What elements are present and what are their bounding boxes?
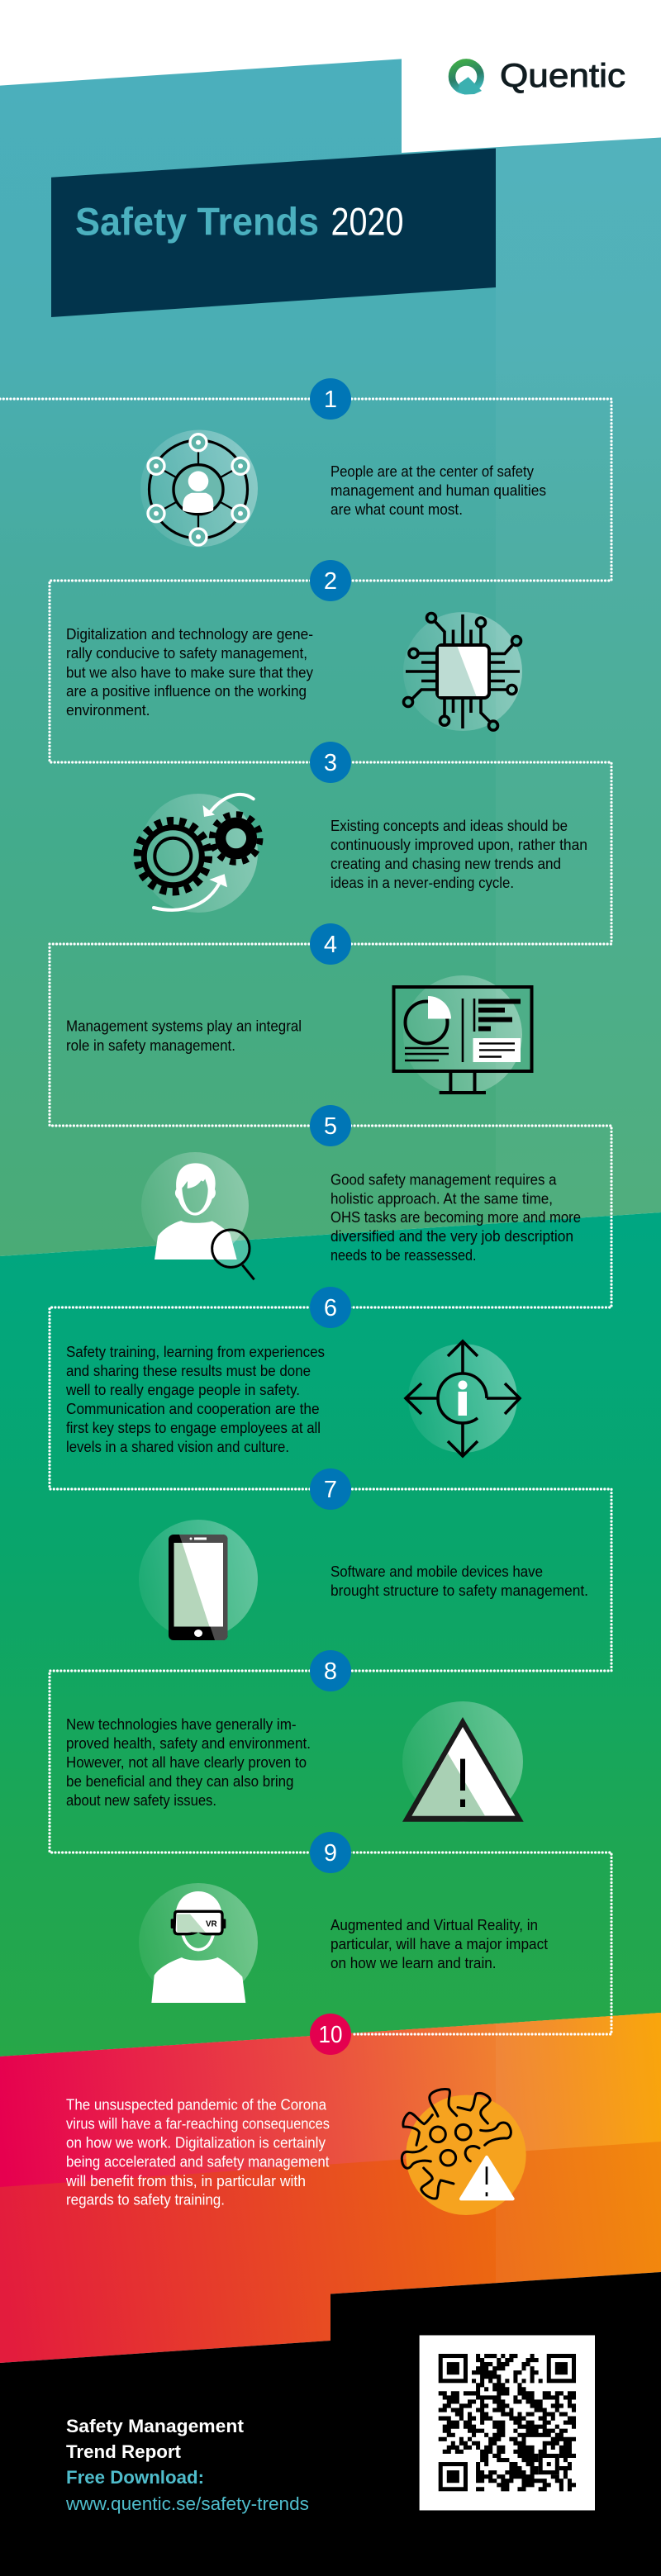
- badge 6: [310, 1287, 351, 1328]
- text 10: virus will have a far-reaching consequences: [66, 2116, 330, 2132]
- icon: virus with warning: [402, 2090, 526, 2215]
- panel: trend 10: [65, 2014, 526, 2215]
- text 4: [66, 1018, 302, 1054]
- icon: microchip: [403, 612, 522, 731]
- panel: trend 7: [139, 1468, 588, 1640]
- badge 2: 2: [324, 568, 337, 595]
- text 5: [330, 1172, 581, 1264]
- title banner: Safety Trends: [75, 199, 319, 243]
- dotted connector path: [0, 399, 611, 2034]
- text 8: proved health, safety and environment.: [66, 1735, 311, 1752]
- badge 8: 8: [324, 1658, 337, 1685]
- text 7: [330, 1563, 588, 1599]
- text 8: about new safety issues.: [66, 1792, 216, 1809]
- badge 7: 7: [324, 1477, 337, 1503]
- icon: people network: [140, 429, 258, 547]
- badge 8: [310, 1650, 351, 1691]
- icon: info with four arrows: [405, 1341, 521, 1456]
- icon: person with VR headset: VR: [206, 1919, 217, 1928]
- badge 4: [310, 923, 351, 965]
- text 4: Management systems play an integral: [66, 1018, 302, 1035]
- text 7: brought structure to safety management.: [330, 1582, 588, 1599]
- text 1: are what count most.: [330, 501, 463, 518]
- background: lighter right column upper: [496, 137, 661, 1223]
- badge 10: 10: [319, 2022, 342, 2048]
- text 9: Augmented and Virtual Reality, in: [330, 1917, 538, 1933]
- text 2: environment.: [66, 702, 150, 719]
- title banner: 2020: [330, 199, 403, 243]
- text 9: [330, 1917, 548, 1971]
- badge 6: 6: [324, 1295, 337, 1321]
- footer: black field: [0, 2272, 661, 2576]
- panel: trend 5: [141, 1105, 581, 1279]
- badge 4: 4: [324, 932, 337, 958]
- text 8: New technologies have generally im-: [66, 1716, 297, 1733]
- background: lighter right column lower: [496, 2013, 661, 2283]
- text 6: Safety training, learning from experiences: [66, 1344, 325, 1360]
- badge 3: [310, 742, 351, 783]
- QR code: [420, 2336, 595, 2511]
- icon: smartphone: [139, 1520, 258, 1640]
- text 6: [65, 1344, 325, 1455]
- background: red-orange light band: [0, 2013, 661, 2187]
- background: teal upper field: [0, 59, 661, 1256]
- text 2: rally conducive to safety management,: [66, 645, 307, 662]
- text 9: particular, will have a major impact: [330, 1936, 548, 1952]
- badge 7: [310, 1468, 351, 1510]
- text 6: and sharing these results must be done: [66, 1363, 311, 1379]
- text 6: well to really engage people in safety.: [65, 1382, 300, 1398]
- badge 9: [310, 1832, 351, 1873]
- icon: dashboard monitor: [393, 975, 532, 1094]
- text 2: but we also have to make sure that they: [66, 664, 313, 681]
- text 8: [66, 1716, 311, 1809]
- text 10: [65, 2097, 330, 2208]
- logo: Quentic: [452, 58, 625, 94]
- text 3: [330, 818, 587, 891]
- text 3: Existing concepts and ideas should be: [330, 818, 568, 834]
- badge 1: 1: [324, 387, 337, 413]
- panel: trend 2: [66, 560, 522, 731]
- icon: person with VR headset: [139, 1883, 258, 2003]
- text 5: needs to be reassessed.: [330, 1247, 476, 1264]
- panel: trend 3: [137, 742, 587, 913]
- text 9: on how we learn and train.: [330, 1955, 496, 1971]
- text 2: Digitalization and technology are gene-: [66, 626, 313, 643]
- text 10: will benefit from this, in particular with: [65, 2173, 306, 2189]
- panel: trend 8: [66, 1650, 524, 1822]
- text 3: ideas in a never-ending cycle.: [330, 875, 514, 891]
- text 10: The unsuspected pandemic of the Corona: [66, 2097, 327, 2113]
- icon: person under magnifier: [141, 1152, 254, 1279]
- footer text: report download: www.quentic.se/safety-trends: [65, 2493, 309, 2514]
- icon: warning triangle: [402, 1701, 524, 1822]
- text 5: diversified and the very job description: [330, 1228, 573, 1245]
- text 2: [66, 626, 313, 719]
- text 4: role in safety management.: [66, 1037, 235, 1054]
- text 6: Communication and cooperation are the: [66, 1401, 320, 1417]
- text 3: continuously improved upon, rather than: [330, 837, 587, 853]
- footer text: report download: [65, 2416, 309, 2514]
- text 10: regards to safety training.: [66, 2192, 225, 2208]
- text 5: OHS tasks are becoming more and more: [330, 1209, 581, 1226]
- text 8: be beneficial and they can also bring: [66, 1773, 294, 1790]
- text 5: Good safety management requires a: [330, 1172, 557, 1188]
- badge 2: [310, 560, 351, 601]
- text 3: creating and chasing new trends and: [330, 856, 561, 872]
- icon: gears with arrows: [137, 794, 260, 913]
- title banner: [51, 149, 496, 317]
- logo: Quentic: Quentic: [500, 58, 625, 94]
- panel: trend 4: [66, 923, 532, 1094]
- text 8: However, not all have clearly proven to: [66, 1754, 307, 1771]
- footer text: report download: Free Download:: [66, 2467, 204, 2488]
- text 7: Software and mobile devices have: [330, 1563, 543, 1580]
- badge 9: 9: [324, 1840, 337, 1867]
- footer text: report download: Safety Management: [66, 2416, 245, 2436]
- panel: trend 6: [65, 1287, 521, 1456]
- text 10: being accelerated and safety management: [66, 2153, 329, 2170]
- badge 1: [310, 378, 351, 420]
- text 1: [330, 463, 546, 518]
- text 1: People are at the center of safety: [330, 463, 534, 480]
- background: red-orange lower field: [0, 2013, 661, 2363]
- text 1: management and human qualities: [330, 482, 546, 499]
- badge 10: [310, 2014, 351, 2055]
- background: green middle field: [0, 1212, 661, 2057]
- text 5: holistic approach. At the same time,: [330, 1190, 553, 1207]
- badge 3: 3: [324, 750, 337, 776]
- badge 5: 5: [324, 1113, 337, 1140]
- text 6: levels in a shared vision and culture.: [66, 1439, 289, 1455]
- panel: trend 1: [140, 378, 546, 547]
- text 6: first key steps to engage employees at all: [66, 1420, 321, 1436]
- footer text: report download: Trend Report: [66, 2441, 182, 2462]
- panel: trend 9: [139, 1832, 548, 2003]
- badge 5: [310, 1105, 351, 1146]
- text 10: on how we work. Digitalization is certainly: [66, 2134, 326, 2151]
- text 2: are a positive influence on the working: [66, 683, 307, 700]
